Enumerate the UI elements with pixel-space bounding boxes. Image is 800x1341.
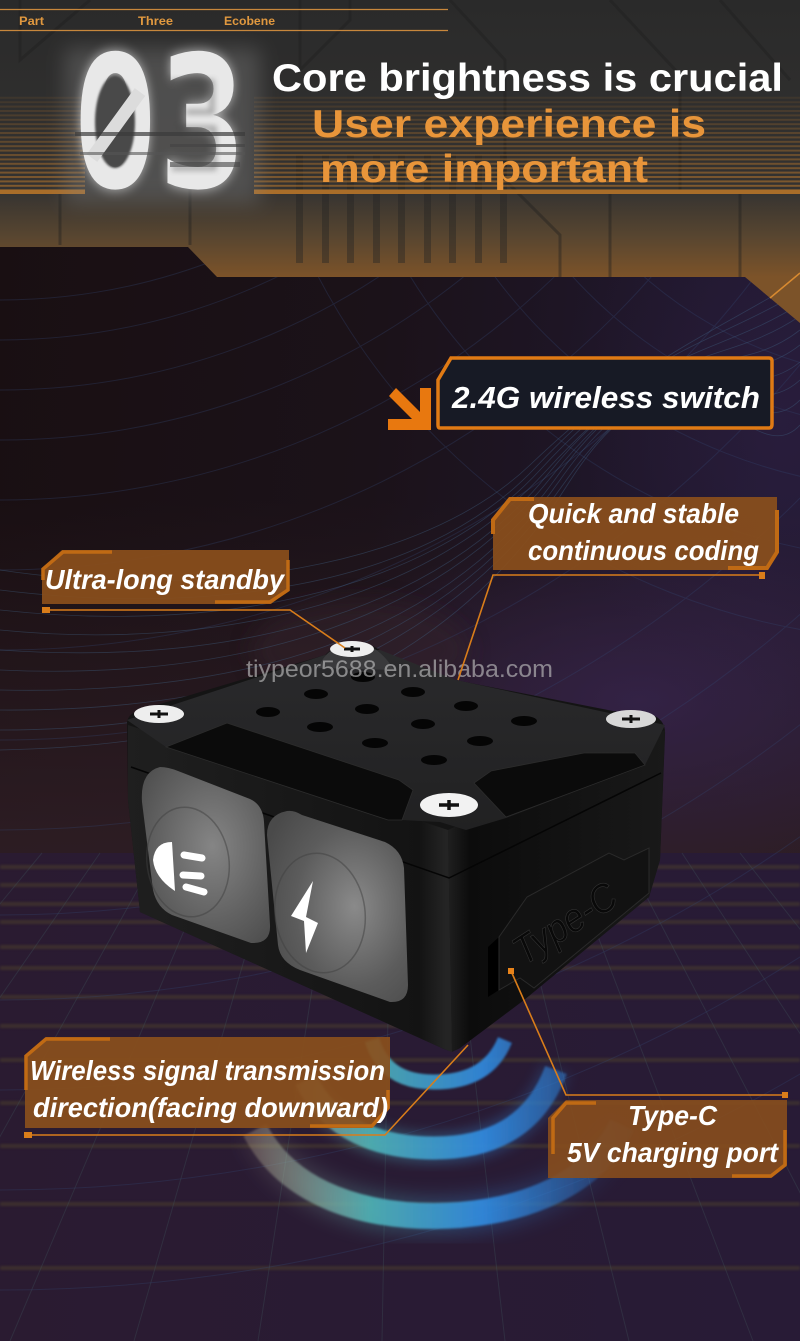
callout: quick and stable: continuous coding — [528, 535, 759, 566]
screws — [134, 641, 656, 817]
right face — [448, 730, 665, 1052]
leader line — [458, 575, 762, 680]
callout: ultra-long standby — [42, 550, 345, 648]
grooves — [166, 723, 645, 820]
grid floor — [0, 853, 800, 1341]
callout: wireless signal direction: Wireless signal transmission — [30, 1055, 385, 1086]
device — [127, 641, 665, 1052]
top rule lines and section labels: Part — [19, 14, 44, 28]
callout: Type-C charging port: Type-C — [628, 1100, 718, 1131]
Type-C port panel: Type-C — [505, 873, 626, 974]
header panel — [0, 0, 800, 323]
left face — [128, 725, 452, 1052]
switch: headlight — [140, 767, 270, 943]
arrow — [388, 388, 431, 430]
callout: quick and stable — [458, 497, 777, 680]
heading: User experience is — [312, 103, 706, 146]
decorative frame lines — [20, 0, 790, 277]
corner accent line — [770, 273, 800, 298]
callout: 2.4G wireless switch: 2.4G wireless switch — [451, 380, 760, 415]
leader line — [511, 971, 785, 1095]
icon: headlight — [153, 842, 204, 892]
callout: Type-C charging port: 5V charging port — [567, 1137, 780, 1168]
top surface — [127, 650, 665, 830]
device body — [127, 642, 665, 1051]
leader line — [28, 1045, 468, 1135]
callout: wireless signal direction — [24, 1037, 468, 1138]
top rule lines and section labels: Three — [138, 14, 173, 28]
rear bump — [318, 642, 394, 670]
switch: lightning — [267, 811, 408, 1002]
callout: ultra-long standby: Ultra-long standby — [45, 564, 285, 595]
Type-C port panel — [488, 848, 649, 997]
seam — [131, 767, 661, 878]
vertical bars — [296, 155, 507, 263]
callout: quick and stable: Quick and stable — [528, 498, 739, 529]
signal arcs — [255, 1040, 622, 1216]
vent holes — [256, 672, 537, 765]
heading: Core brightness is crucial — [272, 57, 783, 100]
heading: more important — [320, 148, 648, 191]
leader line — [46, 610, 345, 648]
callout: wireless signal direction: direction(facing downward) — [33, 1092, 388, 1123]
icon: lightning bolt — [291, 881, 318, 953]
heading — [272, 57, 783, 191]
watermark: tiypeor5688.en.alibaba.com — [246, 656, 553, 683]
top rule lines and section labels — [0, 10, 448, 30]
big number 03: 03 — [72, 17, 245, 230]
scanline band — [0, 96, 800, 194]
callout: Type-C charging port — [508, 968, 788, 1178]
big number 03: 03 — [72, 17, 245, 230]
callout: 2.4G wireless switch — [388, 358, 772, 430]
top rule lines and section labels: Ecobene — [224, 14, 275, 28]
